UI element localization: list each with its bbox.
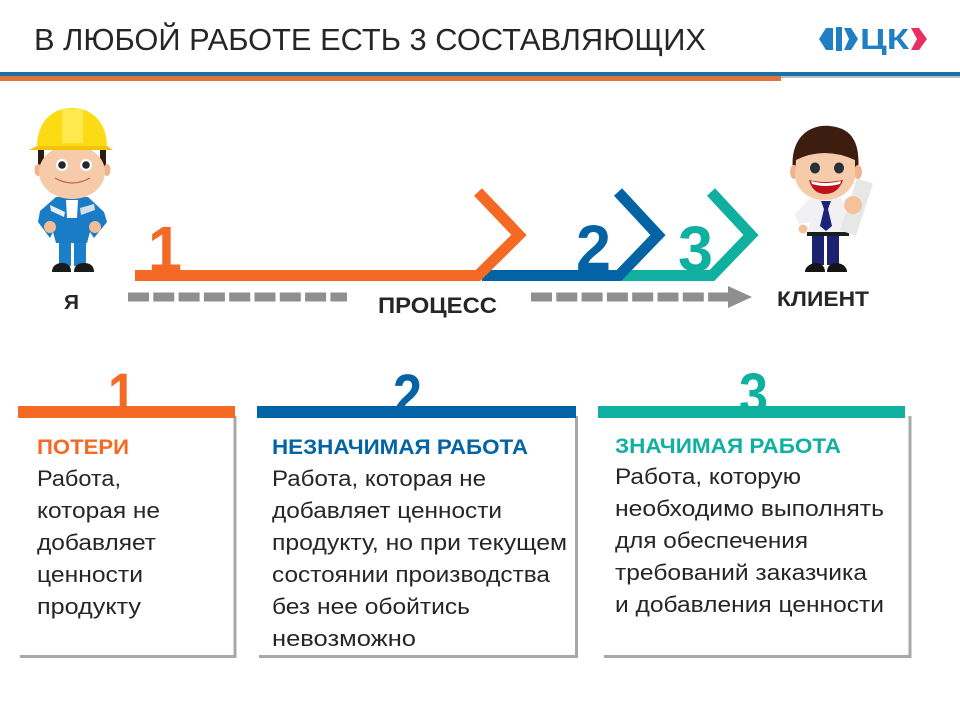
heading: ПОТЕРИ — [37, 436, 129, 459]
number 1 on arrow: 1 — [148, 213, 182, 285]
body text: которая не — [37, 498, 160, 523]
body text — [615, 464, 884, 617]
label: клиент: КЛИЕНТ — [777, 288, 869, 311]
big number 1: 1 — [108, 362, 136, 427]
panel: незначимая работа — [257, 363, 576, 656]
panel frame — [20, 416, 235, 656]
worker head — [34, 145, 110, 199]
client roll — [844, 181, 865, 233]
big number 3: 3 — [739, 362, 768, 427]
client legs — [805, 232, 847, 272]
client head — [790, 126, 862, 200]
color bar — [598, 406, 905, 418]
process dashed arrow — [128, 286, 752, 308]
body text: добавляет ценности — [272, 498, 502, 523]
header rule — [0, 72, 960, 81]
icon: worker with helmet — [29, 108, 113, 272]
body text: требований заказчика — [615, 560, 868, 585]
client shirt — [795, 198, 850, 236]
logo — [819, 24, 927, 56]
arrow: orange chevron 1 — [135, 192, 519, 276]
arrow: blue chevron 2 — [482, 192, 658, 276]
label: я: Я — [64, 292, 79, 314]
body text: продукту — [37, 594, 141, 619]
logo: ЦК — [860, 24, 909, 56]
body text: состоянии производства — [272, 562, 551, 587]
title: В ЛЮБОЙ РАБОТЕ ЕСТЬ 3 СОСТАВЛЯЮЩИХ — [34, 21, 706, 57]
body text: необходимо выполнять — [615, 496, 884, 521]
number 3 on arrow: 3 — [678, 213, 713, 285]
body text: добавляет — [37, 530, 156, 555]
number 2 on arrow: 2 — [576, 212, 611, 284]
icon: client with blueprint roll — [790, 126, 865, 272]
big number 2: 2 — [393, 363, 422, 428]
body text: без нее обойтись — [272, 594, 470, 619]
body text: для обеспечения — [615, 528, 808, 553]
worker legs — [52, 238, 94, 272]
worker jacket — [38, 197, 107, 243]
body text: Работа, которую — [615, 464, 801, 489]
label: процесс: ПРОЦЕСС — [378, 293, 497, 318]
worker helmet — [29, 108, 113, 150]
body text: ценности — [37, 562, 143, 587]
panel frame — [259, 416, 576, 656]
color bar — [257, 406, 576, 418]
panel: значимая работа — [598, 362, 910, 656]
panel frame — [604, 416, 910, 656]
body text: и добавления ценности — [615, 592, 884, 617]
color bar — [18, 406, 235, 418]
body text: Работа, которая не — [272, 466, 486, 491]
body text — [272, 466, 567, 651]
panel: потери — [18, 362, 235, 656]
body text: продукту, но при текущем — [272, 530, 567, 555]
arrow: teal chevron 3 — [622, 192, 751, 276]
body text — [37, 466, 160, 619]
heading: НЕЗНАЧИМАЯ РАБОТА — [272, 436, 528, 459]
body text: Работа, — [37, 466, 121, 491]
body text: невозможно — [272, 626, 416, 651]
heading: ЗНАЧИМАЯ РАБОТА — [615, 435, 841, 458]
